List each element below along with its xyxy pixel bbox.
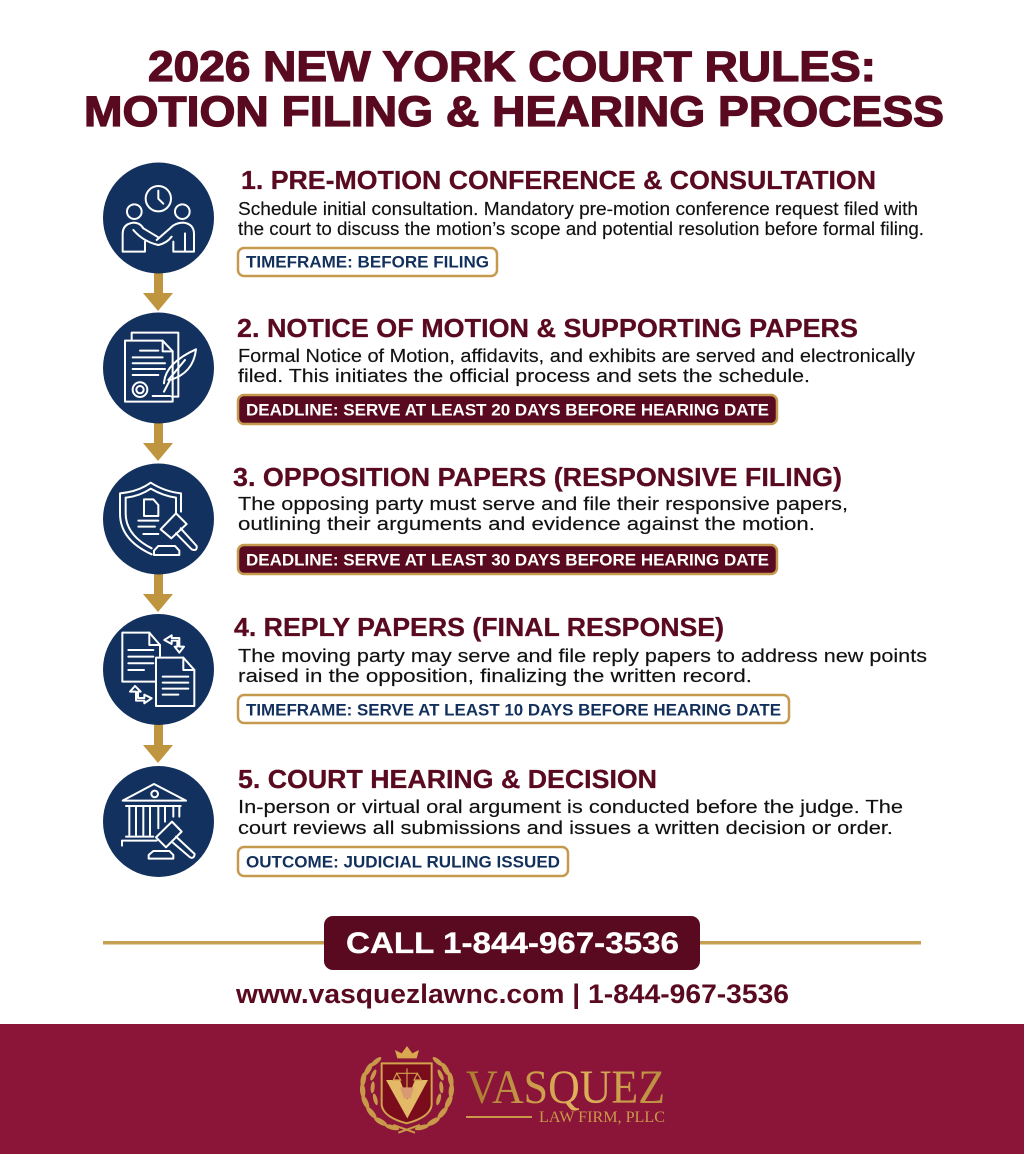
- call to action: CALL 1-844-967-3536: [346, 927, 679, 960]
- text: step 4 description: The moving party may serve and file reply papers to address new points: [238, 646, 927, 666]
- badge: deadline 20 days: [238, 395, 777, 424]
- icon: courthouse with gavel: [103, 766, 214, 877]
- badge: deadline 30 days: [238, 545, 777, 574]
- panel: step 3: [103, 462, 848, 574]
- icon: crest: [359, 1046, 455, 1133]
- icon: consultation handshake: [103, 162, 214, 274]
- arrow: step 1 to 2: [143, 272, 173, 311]
- text: step 4 description: raised in the opposition, finalizing the written record.: [238, 666, 752, 686]
- panel: step 2: [103, 312, 915, 424]
- logo: Vasquez Law Firm: [359, 1046, 665, 1133]
- text: step 5 description: court reviews all submissions and issues a written decision or order.: [238, 818, 893, 838]
- badge: outcome: OUTCOME: JUDICIAL RULING ISSUED: [246, 852, 560, 872]
- heading: step 4: 4. REPLY PAPERS (FINAL RESPONSE): [234, 612, 724, 642]
- footer band: [0, 1024, 1024, 1154]
- title: MOTION FILING & HEARING PROCESS: [84, 88, 944, 136]
- badge: timeframe 10 days: [238, 695, 789, 723]
- logo wordmark: LAW FIRM, PLLC: [539, 1109, 665, 1126]
- text: step 2 description: [238, 346, 915, 386]
- text: step 3 description: The opposing party must serve and file their responsive papers,: [238, 494, 848, 514]
- title: [84, 43, 944, 136]
- heading: step 2: 2. NOTICE OF MOTION & SUPPORTING PAPERS: [237, 313, 858, 343]
- text: step 2 description: filed. This initiates the official process and sets the schedule.: [238, 366, 810, 386]
- badge: deadline 20 days: DEADLINE: SERVE AT LEAST 20 DAYS BEFORE HEARING DATE: [246, 400, 769, 420]
- text: step 4 description: [238, 646, 927, 686]
- text: step 5 description: In-person or virtual oral argument is conducted before the judge. The: [238, 797, 903, 817]
- panel: step 5: [103, 764, 903, 877]
- text: step 2 description: Formal Notice of Motion, affidavits, and exhibits are served and electronically: [238, 346, 915, 366]
- heading: step 3: 3. OPPOSITION PAPERS (RESPONSIVE FILING): [233, 462, 842, 492]
- text: step 3 description: [238, 494, 848, 534]
- badge: timeframe before filing: [238, 248, 497, 276]
- badge: outcome: [238, 847, 568, 876]
- panel: step 4: [103, 612, 927, 725]
- text: step 3 description: outlining their arguments and evidence against the motion.: [238, 514, 815, 534]
- icon: notice document with quill: [103, 312, 214, 424]
- logo wordmark: VASQUEZ: [466, 1061, 665, 1114]
- badge: timeframe 10 days: TIMEFRAME: SERVE AT LEAST 10 DAYS BEFORE HEARING DATE: [246, 700, 781, 720]
- call to action: [103, 916, 921, 970]
- badge: deadline 30 days: DEADLINE: SERVE AT LEAST 30 DAYS BEFORE HEARING DATE: [246, 550, 769, 570]
- text: step 5 description: [238, 797, 903, 838]
- icon: exchanged documents: [103, 614, 214, 725]
- heading: step 1: 1. PRE-MOTION CONFERENCE & CONSULTATION: [241, 165, 876, 195]
- contact line: www.vasquezlawnc.com | 1-844-967-3536: [235, 979, 789, 1009]
- icon: shield with gavel: [103, 464, 214, 574]
- text: step 1 description: [238, 199, 924, 239]
- text: step 1 description: the court to discuss the motion’s scope and potential resolution before formal filing.: [238, 219, 924, 239]
- arrow: step 2 to 3: [143, 422, 173, 461]
- panel: step 1: [103, 162, 924, 276]
- title: 2026 NEW YORK COURT RULES:: [148, 43, 876, 91]
- heading: step 5: 5. COURT HEARING & DECISION: [238, 764, 657, 794]
- arrow: step 4 to 5: [143, 724, 173, 763]
- text: step 1 description: Schedule initial consultation. Mandatory pre-motion conference request filed with: [238, 199, 918, 219]
- arrow: step 3 to 4: [143, 573, 173, 612]
- badge: timeframe before filing: TIMEFRAME: BEFORE FILING: [246, 252, 489, 272]
